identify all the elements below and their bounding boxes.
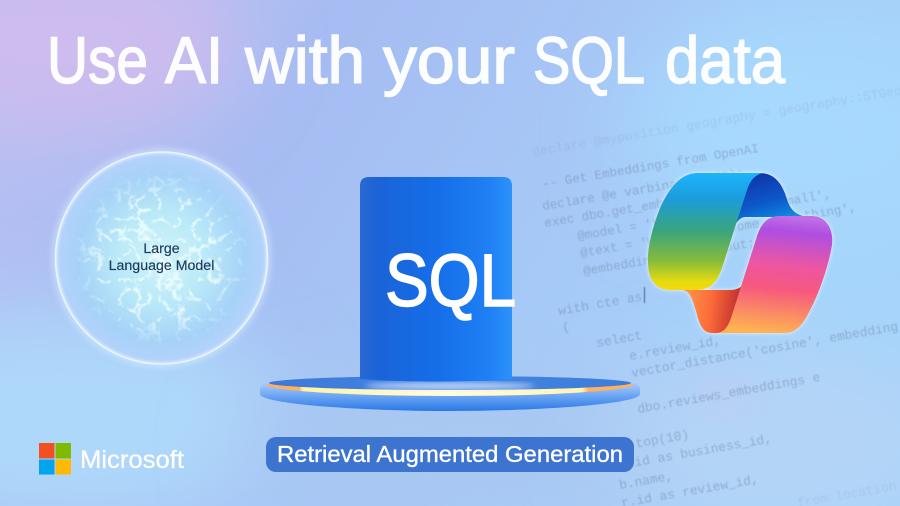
fibers texture <box>78 174 246 342</box>
sphere: large language model <box>52 148 272 368</box>
code background: ( <box>561 320 571 336</box>
code background: with cte as <box>557 289 643 319</box>
platform <box>260 376 640 411</box>
Microsoft wordmark: Microsoft <box>80 446 184 474</box>
title: SQL <box>533 23 645 97</box>
code background: @model = 'text-embedding-3-small', <box>576 188 832 244</box>
orange fold <box>683 282 745 333</box>
code background: declare @myposition geography = geography::STGeo <box>531 83 900 160</box>
sphere label: Language Model <box>109 258 214 274</box>
code background: @embedding = @e output; <box>582 236 756 279</box>
code background: select <box>595 328 643 351</box>
code background: select top(10) <box>581 427 690 461</box>
title: data <box>665 23 785 97</box>
SQL label: SQL <box>385 239 516 322</box>
code background: declare @e varbinary(8000); <box>541 166 745 214</box>
title: your <box>383 23 515 97</box>
title: Use <box>47 23 148 97</box>
pink band <box>717 216 832 333</box>
code background: @text = 'Write here some good thing', <box>579 201 857 261</box>
green band <box>648 173 764 290</box>
SQL cylinder <box>360 177 516 382</box>
code background: -- Get Embeddings from OpenAI <box>541 142 760 192</box>
title: with <box>244 23 365 97</box>
dark blue fold <box>733 173 810 228</box>
icon: Copilot logo <box>648 173 832 333</box>
sphere label: Large <box>143 241 180 257</box>
code background: dbo.reviews_embeddings e <box>636 370 822 417</box>
code background: b.name, <box>618 469 674 493</box>
Microsoft logo <box>39 443 184 474</box>
Retrieval Augmented Generation pill <box>266 437 634 472</box>
Retrieval Augmented Generation pill: Retrieval Augmented Generation <box>277 441 623 467</box>
title: AI <box>165 23 223 97</box>
code background: vector_distance('cosine', embedding <box>630 319 899 381</box>
title <box>47 23 785 97</box>
code background <box>531 83 900 506</box>
code background: exec dbo.get_embedding <box>543 190 710 231</box>
code background: e.id as business_id, <box>618 431 773 473</box>
code background: e.review_id, <box>628 333 722 364</box>
